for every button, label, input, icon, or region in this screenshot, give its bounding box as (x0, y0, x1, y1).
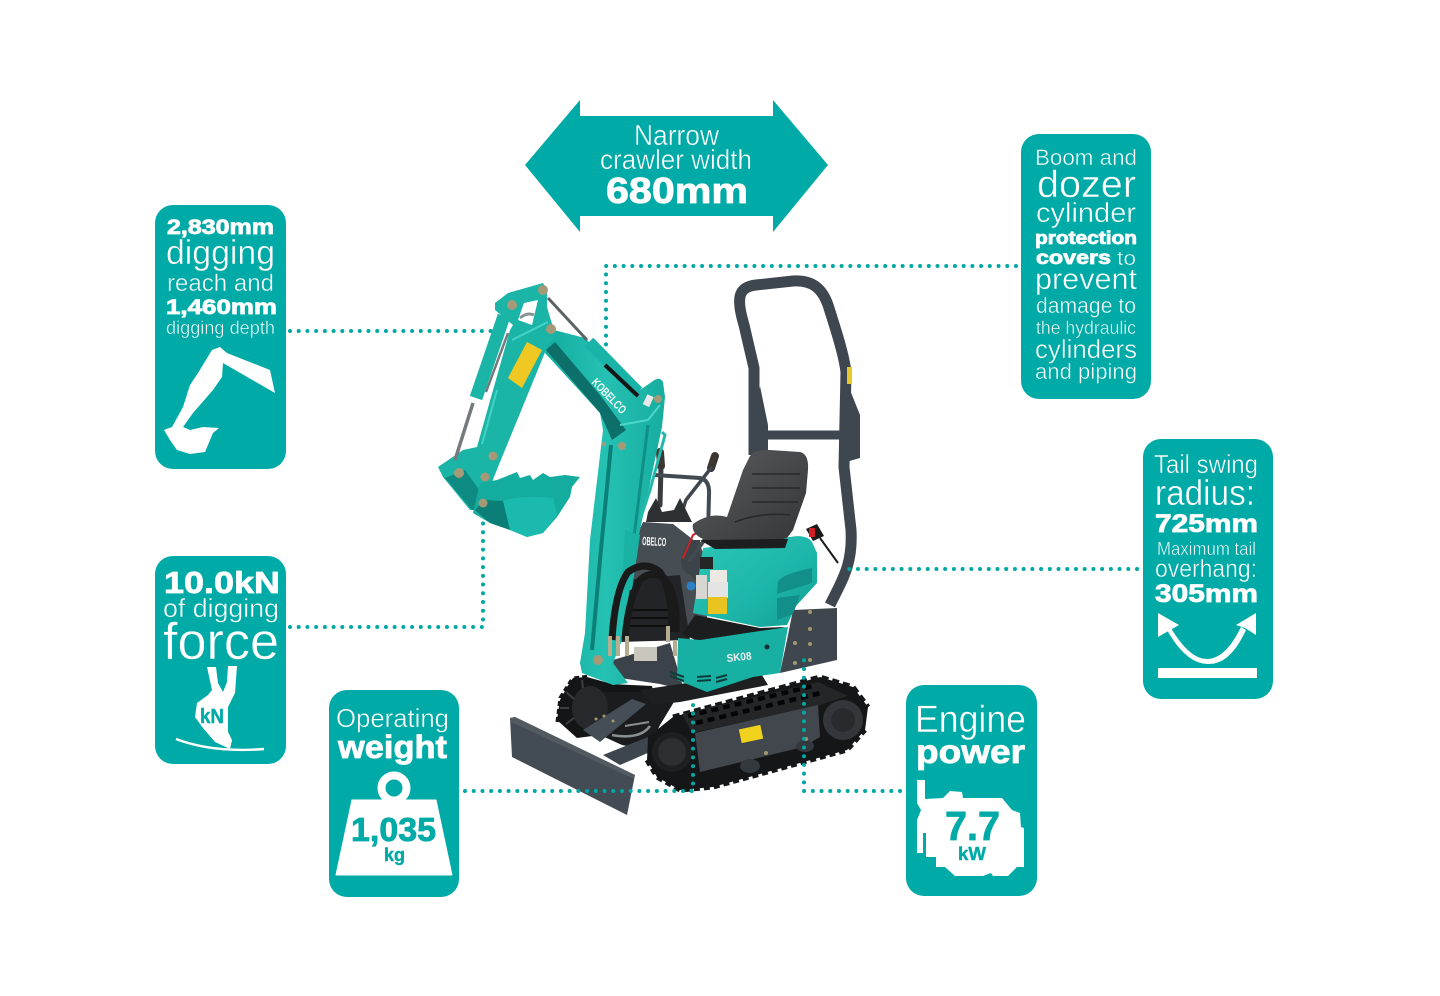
warning sticker (739, 725, 763, 743)
teal lower skirt: SK08 (726, 650, 752, 665)
engine power text: Engine (915, 699, 1026, 741)
operating weight text: Operating (336, 703, 449, 733)
arrow text: 680mm (606, 170, 748, 211)
arrow text: Narrow (634, 120, 720, 152)
left crawler track (557, 677, 680, 750)
tail swing text: Tail swing (1154, 449, 1258, 479)
icon: engine: 7.7 (945, 803, 1000, 849)
track side frame (695, 705, 820, 772)
digging reach text: 2,830mm (167, 216, 274, 239)
boom: KOBELCO (589, 375, 629, 417)
control levers (646, 452, 715, 560)
cylinder protection text: Boom and (1035, 145, 1137, 170)
tail swing text: overhang: (1155, 555, 1257, 583)
icon: weight: 1,035 (351, 811, 436, 848)
panel: operating weight (329, 690, 459, 897)
arm cylinder (455, 316, 508, 460)
teal lower skirt (670, 627, 788, 692)
cylinder protection text: and piping (1035, 359, 1137, 384)
operating weight text (336, 703, 449, 765)
grey undercarriage frame (613, 643, 768, 705)
icon: bucket force (176, 666, 264, 750)
digging force text: of digging (163, 593, 279, 623)
digging force text (163, 565, 280, 671)
right crawler track (647, 677, 868, 790)
panel: tail swing (1143, 439, 1273, 699)
operator console: OBELCO (642, 534, 667, 549)
cylinder protection text: cylinders (1035, 334, 1137, 364)
cylinder protection text: damage to (1036, 293, 1136, 318)
operating weight text: weight (337, 729, 447, 765)
rear counterweight plate (780, 608, 837, 673)
panel: digging force (155, 556, 286, 764)
cylinder protection text: the hydraulic (1036, 318, 1136, 338)
digging reach text: digging (166, 234, 275, 272)
red safety button (806, 524, 838, 563)
boom (545, 329, 665, 685)
cylinder protection text (1035, 145, 1138, 384)
icon: weight (336, 776, 452, 875)
panel: cylinder protection (1021, 134, 1151, 399)
cylinder protection text: covers (1036, 248, 1111, 269)
arm warning label (508, 342, 542, 388)
dotted leader lines (290, 266, 1137, 791)
cylinder protection text: protection (1035, 228, 1137, 248)
tail swing text (1154, 449, 1258, 608)
roll-over protection bar (740, 281, 860, 605)
panel: digging reach (155, 205, 286, 469)
operator console (618, 522, 707, 642)
digging reach text: reach and (167, 270, 274, 297)
icon: weight: kg (384, 845, 405, 865)
tail swing text: radius: (1155, 472, 1255, 513)
panel: engine power (906, 685, 1037, 896)
tail swing text: 725mm (1155, 510, 1258, 538)
arrow: narrow crawler width (525, 100, 828, 232)
digging reach text: digging depth (166, 318, 275, 338)
dozer blade (510, 699, 650, 815)
digging reach text: 1,460mm (166, 296, 277, 319)
cylinder protection text: cylinder (1036, 197, 1136, 228)
bucket (473, 472, 580, 537)
operator seat (693, 450, 808, 549)
digging force text: force (163, 613, 279, 671)
icon: engine: kW (958, 844, 986, 864)
tail swing text: 305mm (1155, 580, 1258, 608)
boom cylinder (548, 298, 638, 396)
cylinder protection text: to (1117, 248, 1136, 270)
arm (438, 283, 557, 510)
engine power text: power (916, 733, 1025, 770)
icon: engine (917, 780, 1024, 876)
cylinder protection text: prevent (1035, 263, 1138, 296)
icon: tail swing arrows (1158, 613, 1257, 678)
icon: excavator arm (164, 347, 275, 454)
arrow text: crawler width (600, 144, 752, 175)
tail swing text: Maximum tail (1157, 539, 1256, 559)
icon: bucket force: kN (200, 706, 224, 728)
hood stickers (696, 557, 728, 614)
cylinder protection text: dozer (1037, 164, 1136, 206)
digging reach text (166, 216, 277, 338)
arrow text (600, 120, 752, 211)
hydraulic hoses (610, 566, 676, 656)
engine power text (915, 699, 1026, 770)
teal engine hood (693, 536, 817, 627)
floor plate (682, 615, 785, 642)
digging force text: 10.0kN (164, 565, 280, 600)
excavator machine (438, 281, 868, 815)
